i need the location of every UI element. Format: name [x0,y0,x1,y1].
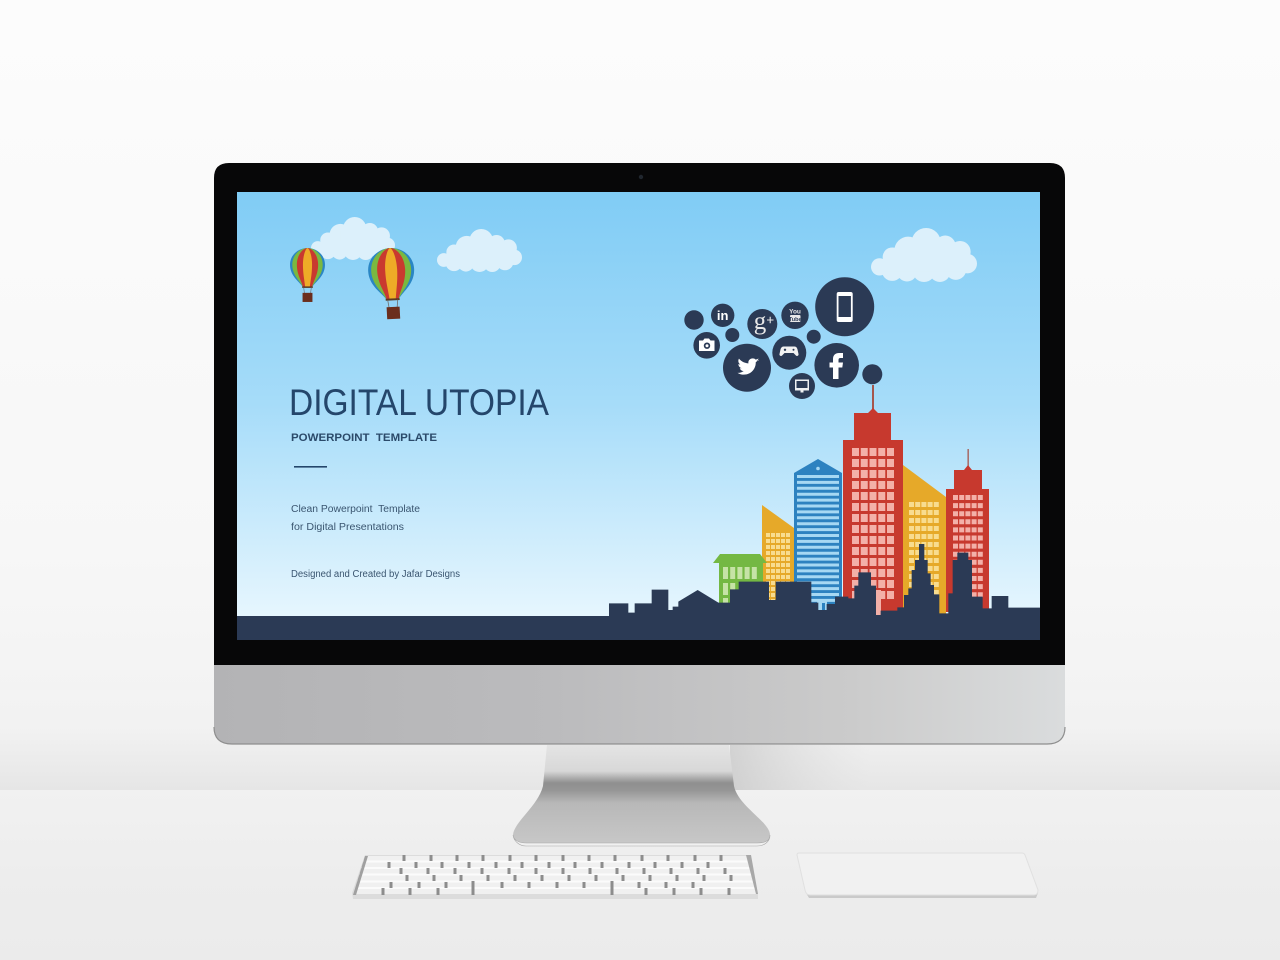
title: DIGITAL UTOPIA [289,382,549,423]
city skyline silhouette [600,544,1040,640]
cloud left [311,217,395,260]
sky [237,192,1040,616]
monitor bezel [214,163,1065,665]
bubble: plain small right [807,330,821,344]
short rule [294,466,327,468]
bubble: facebook [814,343,859,388]
bubble: google plus [747,308,777,339]
building: green [713,554,767,613]
bubble: youtube: You [789,308,801,316]
bubble: gamepad [772,336,806,370]
slide screen [237,192,1040,640]
bubble: twitter [723,344,771,392]
monitor stand [513,745,770,846]
background: desk [0,790,1280,960]
building: yellow right [903,465,946,616]
bubble: camera [693,332,720,359]
monitor chin [214,665,1065,744]
social media bubble cluster [684,277,882,399]
bubble: monitor [789,373,815,399]
building: red right [946,449,989,612]
balloon small [290,248,325,302]
description line 1: Clean Powerpoint Template [291,504,420,515]
bubble: linkedin [711,304,734,327]
building: blue [794,459,842,612]
bubble: youtube: Tube [789,317,802,323]
bubble: plain [684,310,704,330]
webcam [639,175,643,179]
bubble: linkedin: in [717,308,729,323]
credit: Designed and Created by Jafar Designs [291,569,460,580]
building: red tall [843,385,903,616]
stand shadow on wall [730,745,870,790]
bubble: youtube [781,302,809,329]
bubble: plain small [725,328,739,342]
bubble: chimney smoke [862,364,882,384]
ground band [237,616,1040,640]
trackpad [797,853,1038,898]
subtitle: POWERPOINT TEMPLATE [291,432,437,444]
bubble: phone [815,277,874,336]
building: yellow left [762,505,794,612]
monitor [214,163,1065,744]
keyboard [352,855,758,899]
balloon large [367,247,417,320]
description line 2: for Digital Presentations [291,522,404,533]
bubble: google plus: g [754,308,767,335]
cloud middle [437,229,522,272]
cloud right [871,228,977,282]
